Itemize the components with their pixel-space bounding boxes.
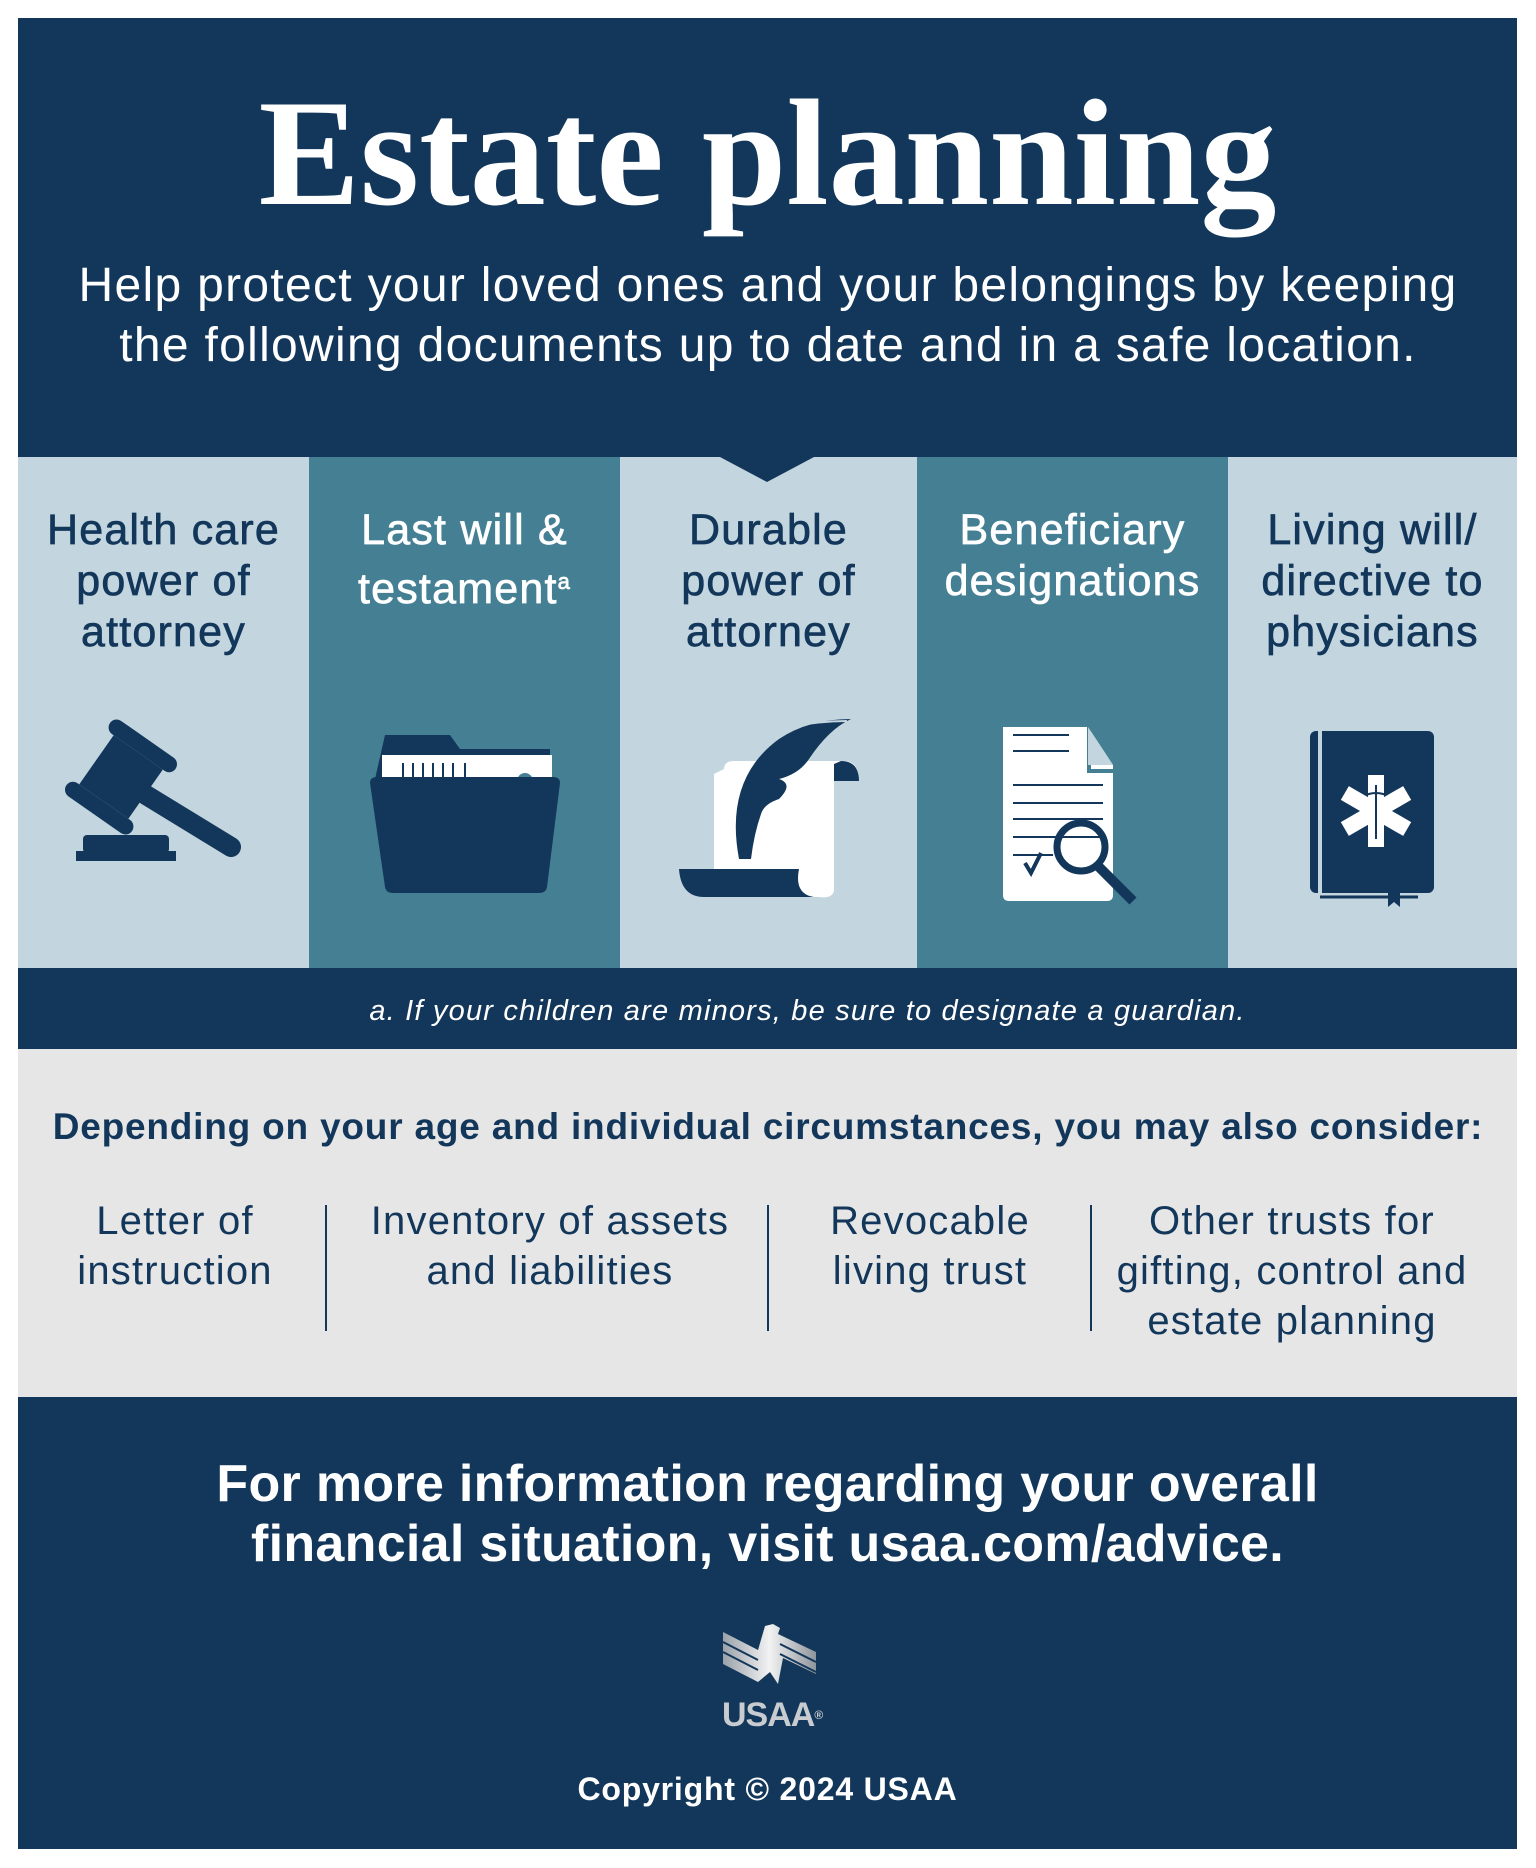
footnote: a. If your children are minors, be sure to designate a guardian. [369,995,1246,1027]
heading [681,506,856,656]
call to action [216,1455,1319,1573]
icon: document with magnifier [1003,727,1136,904]
subtitle [79,259,1457,372]
logo: USAA: USAA® [722,1696,822,1734]
subtitle: Help protect your loved ones and your belongings by keeping [79,259,1457,312]
consider heading: Depending on your age and individual circumstances, you may also consider: [53,1106,1483,1147]
icon: gavel [65,720,241,861]
panel: living will [1228,457,1517,968]
heading: power of [681,557,856,605]
item: other trusts: estate planning [1147,1299,1437,1343]
heading [1261,506,1484,656]
item: letter of instruction [77,1199,273,1293]
item: other trusts: gifting, control and [1117,1249,1467,1293]
item: revocable living trust: Revocable [830,1199,1030,1243]
heading: attorney [686,608,851,656]
item: letter of instruction: instruction [77,1249,273,1293]
heading: Living will/ [1267,506,1478,554]
item: revocable living trust [830,1199,1030,1293]
item: inventory: and liabilities [426,1249,674,1293]
panel: durable power of attorney [620,457,917,968]
heading: attorney [81,608,246,656]
heading [358,506,571,613]
item: inventory: Inventory of assets [371,1199,729,1243]
heading: Last will & [361,506,568,554]
panel: health care power of attorney [18,457,309,968]
icon: folder [370,735,560,893]
heading: Beneficiary [960,506,1185,554]
heading: physicians [1266,608,1479,656]
heading: directive to [1261,557,1484,605]
title: Estate planning [259,69,1276,237]
icon: medical book [1310,731,1434,907]
item: other trusts [1117,1199,1467,1343]
icon: quill and scroll [679,719,859,898]
heading [47,506,280,656]
heading: Health care [47,506,280,554]
call to action: financial situation, visit usaa.com/advice. [251,1515,1284,1573]
panel: beneficiary designations [917,457,1228,968]
panel: last will & testament [309,457,620,968]
heading: designations [945,557,1200,605]
item: other trusts: Other trusts for [1149,1199,1435,1243]
item: revocable living trust: living trust [833,1249,1027,1293]
item: letter of instruction: Letter of [96,1199,254,1243]
copyright: Copyright © 2024 USAA [577,1771,958,1807]
panel: also consider [18,1049,1517,1397]
heading [945,506,1200,605]
heading: power of [76,557,251,605]
subtitle: the following documents up to date and in a safe location. [119,319,1417,372]
logo: USAA [722,1624,823,1734]
item: inventory [371,1199,729,1293]
notch arrow [720,457,814,482]
call to action: For more information regarding your overall [216,1455,1319,1513]
heading: testamenta [358,565,571,613]
heading: Durable [689,506,848,554]
